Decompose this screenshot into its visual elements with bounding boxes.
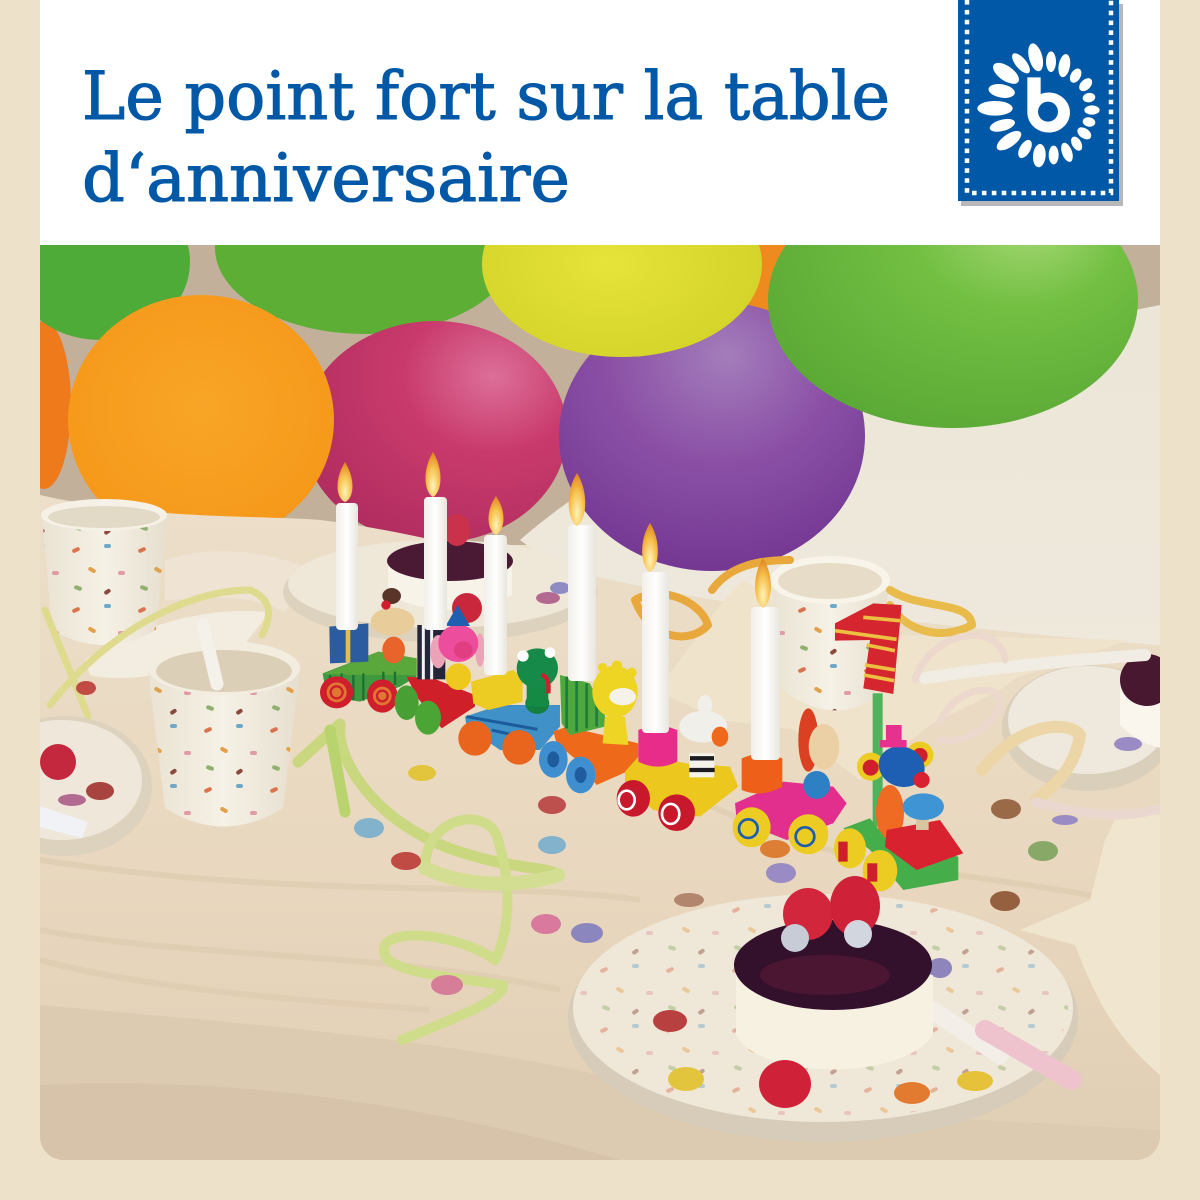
raspberry on plate [759, 1060, 811, 1108]
photo: birthday table [40, 245, 1160, 1160]
table cloth [40, 495, 1160, 1160]
bottom right napkin [1020, 810, 1160, 1075]
plate: left [40, 716, 152, 856]
title: d‘anniversaire [82, 140, 570, 217]
car 3: blue with frog and yellow gift [458, 647, 560, 765]
logo: blue tag with white flower and letter b [958, 0, 1123, 206]
front fold of centre napkin [795, 679, 1014, 774]
car 4: orange with giraffe and green gift [539, 660, 638, 793]
centre napkin [669, 580, 1129, 729]
title panel [40, 0, 1160, 245]
smarties on plate [653, 958, 993, 1104]
flames [337, 452, 771, 608]
table front edge fold [40, 1005, 376, 1038]
balloons [40, 245, 1138, 571]
plate: right with cake [1002, 654, 1174, 791]
big plate with cake [568, 876, 1078, 1142]
back left pale napkin [165, 551, 310, 612]
car 2: red with pink elephant [395, 605, 485, 735]
white fluffy blanket [520, 305, 1160, 665]
left napkin [85, 611, 270, 678]
car 7: engine with number 1 and mouse [834, 603, 963, 891]
title: Le point fort sur la table [82, 58, 890, 135]
cup: front left with spoon [148, 625, 300, 826]
car 5: yellow with zebra and pink holder [617, 695, 738, 831]
candle train [320, 452, 963, 891]
cheesecake [734, 876, 933, 1070]
fork [932, 1010, 1072, 1080]
back plate with cake [283, 514, 597, 642]
candles [336, 497, 780, 760]
cup: back left [41, 499, 167, 645]
table wrinkles [40, 805, 1092, 994]
smarties on the table [76, 681, 1078, 995]
car 6: pink with lion and orange holder [733, 708, 847, 854]
ribbons [45, 560, 1160, 1040]
car 1: green with monkey and blue gift [320, 588, 417, 713]
wall behind balloons [40, 245, 1160, 545]
fork top right [925, 655, 1145, 678]
cup: back right [770, 556, 890, 710]
